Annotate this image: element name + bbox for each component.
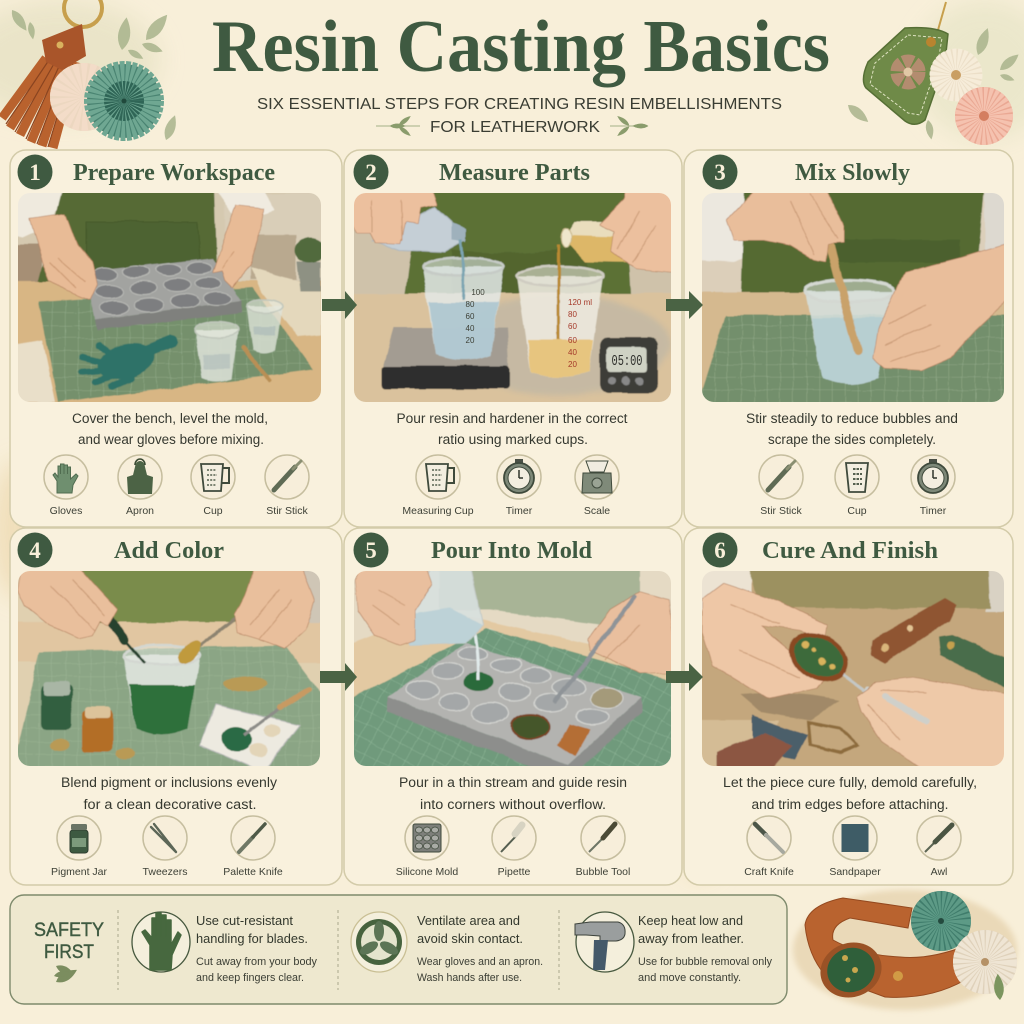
description: [72, 411, 268, 447]
arrow: step 4 to 5: [320, 663, 357, 691]
tool: cup: [835, 455, 879, 517]
description: Stir steadily to reduce bubbles and: [746, 411, 958, 426]
description: Pour in a thin stream and guide resin: [399, 775, 627, 790]
tool: sandpaper: [829, 816, 881, 878]
step number 1: [18, 154, 52, 190]
description: [61, 775, 277, 812]
heading: Mix Slowly: [795, 160, 910, 186]
safety item: cut resistant: [132, 912, 317, 984]
heading: Pour Into Mold: [431, 538, 593, 564]
cup scale numbers: 20: [466, 336, 475, 345]
step number 2: [354, 154, 388, 190]
tool: bubble tool: [576, 816, 630, 878]
scale: [381, 328, 510, 389]
illustration: adding pigment to cup: [12, 565, 326, 772]
timer display: 05:00: [612, 353, 642, 370]
cup scale numbers: 100: [471, 288, 485, 297]
safety heading: [34, 920, 104, 963]
arrow: step 1 to 2: [322, 291, 357, 319]
tool: palette knife: Palette Knife: [223, 866, 283, 878]
step number 4: [18, 532, 52, 568]
description: into corners without overflow.: [420, 797, 606, 812]
panel: step 5 pour into mold: [344, 528, 682, 885]
arrow: step 2 to 3: [666, 291, 703, 319]
cup 1: [422, 240, 504, 360]
cup scale numbers: [466, 288, 592, 369]
description: ratio using marked cups.: [438, 432, 588, 447]
panel: step 6 cure and finish: [684, 528, 1013, 885]
step number 1: 1: [29, 160, 41, 185]
step number 2: 2: [365, 160, 377, 185]
gloves: [82, 337, 172, 386]
tool: gloves: Gloves: [50, 505, 82, 517]
step number 3: [702, 154, 738, 190]
description: [723, 775, 977, 812]
tool: cup: [191, 455, 235, 517]
safety item: ventilate: avoid skin contact.: [417, 932, 523, 946]
illustration: pouring resin in mold: [354, 571, 671, 766]
tool: cup: Cup: [203, 505, 223, 517]
tool: stir stick: [759, 455, 803, 517]
tool: bubble tool: Bubble Tool: [576, 866, 630, 878]
cup 2: [517, 245, 603, 377]
cup scale numbers: 40: [568, 348, 577, 357]
description: scrape the sides completely.: [768, 432, 936, 447]
subtitle: FOR LEATHERWORK: [430, 119, 600, 136]
heading: Measure Parts: [439, 160, 590, 186]
decoration: leather tag and pompoms, top right: [845, 2, 1021, 145]
tool: pigment jar: Pigment Jar: [51, 866, 108, 878]
decoration: leather belt with resin cabochon and pompoms: [793, 890, 1017, 1010]
step number 5: 5: [365, 538, 377, 563]
step number 6: 6: [714, 538, 726, 563]
safety item: ventilate: Ventilate area and: [417, 914, 520, 928]
tool: cup: Cup: [847, 505, 867, 517]
cup scale numbers: 60: [466, 312, 475, 321]
tool: craft knife: [744, 816, 794, 878]
safety item: cut resistant: and keep fingers clear.: [196, 972, 304, 984]
safety item: heat gun: Keep heat low and: [638, 914, 743, 928]
subtitle leaf ornaments: [376, 115, 648, 137]
safety item: heat gun: and move constantly.: [638, 972, 741, 984]
arrow: step 5 to 6: [666, 663, 703, 691]
cup scale numbers: 120 ml: [568, 298, 592, 307]
step number 4: 4: [29, 538, 41, 563]
timer body: [600, 337, 658, 393]
subtitle: SIX ESSENTIAL STEPS FOR CREATING RESIN EMBELLISHMENTS: [257, 96, 782, 113]
safety heading: FIRST: [44, 942, 94, 963]
tool: gloves: [44, 455, 88, 517]
cup scale numbers: 80: [466, 300, 475, 309]
illustration: pouring into cups on a scale: [348, 187, 677, 408]
cup scale numbers: 60: [568, 322, 577, 331]
description: Cover the bench, level the mold,: [72, 411, 268, 426]
tool: awl: [917, 816, 961, 878]
illustration: mold, gloves and cups on mat: [12, 187, 327, 408]
tool: measuring cup: Measuring Cup: [402, 505, 474, 517]
heading: Add Color: [114, 538, 224, 564]
description: [399, 775, 627, 812]
tool: apron: [118, 455, 162, 517]
decoration: tassel and pompoms, top left: [2, 0, 180, 148]
step number 5: [354, 532, 388, 568]
description: Pour resin and hardener in the correct: [396, 411, 628, 426]
subtitle: [257, 96, 782, 136]
tool: craft knife: Craft Knife: [744, 866, 794, 878]
tool: timer: [497, 455, 541, 517]
tool: measuring cup: [402, 455, 474, 517]
tool: timer: Timer: [506, 505, 533, 517]
safety item: cut resistant: Cut away from your body: [196, 956, 317, 968]
tool: stir stick: Stir Stick: [266, 505, 308, 517]
panel: step 4 add color: [10, 528, 342, 885]
tool: pigment jar: [51, 816, 108, 878]
description: for a clean decorative cast.: [84, 797, 256, 812]
tool: silicone mold: Silicone Mold: [396, 866, 458, 878]
safety item: cut resistant: handling for blades.: [196, 932, 308, 946]
heading: Prepare Workspace: [73, 160, 275, 186]
tool: tweezers: Tweezers: [143, 866, 187, 878]
description: [746, 411, 958, 447]
safety item: heat gun: [575, 912, 772, 984]
tool: palette knife: [223, 816, 283, 878]
safety item: heat gun: Use for bubble removal only: [638, 956, 772, 968]
safety item: ventilate: [351, 912, 543, 984]
description: and trim edges before attaching.: [752, 797, 948, 812]
description: Let the piece cure fully, demold carefully,: [723, 775, 977, 790]
hands holding bottles: [348, 187, 677, 272]
tool: scale: Scale: [584, 505, 610, 517]
safety item: cut resistant: Use cut-resistant: [196, 914, 294, 928]
safety item: ventilate: Wash hands after use.: [417, 972, 522, 984]
heading: Cure And Finish: [762, 538, 938, 564]
panel: safety first: [10, 895, 787, 1004]
step number 6: [702, 532, 738, 568]
tool: timer: [911, 455, 955, 517]
tool: pipette: Pipette: [498, 866, 530, 878]
description: [396, 411, 628, 447]
panel: step 3 mix slowly: [684, 150, 1013, 527]
tool: silicone mold: [396, 816, 458, 878]
safety item: heat gun: away from leather.: [638, 932, 744, 946]
tool: sandpaper: Sandpaper: [829, 866, 881, 878]
tool: apron: Apron: [126, 505, 154, 517]
title: Resin Casting Basics: [212, 6, 830, 88]
leaf sprig: [53, 963, 79, 986]
panel: step 2 measure parts: [344, 150, 682, 527]
illustration: trimming finished piece: [696, 565, 1010, 772]
cup scale numbers: 40: [466, 324, 475, 333]
safety heading: SAFETY: [34, 920, 104, 941]
tool: timer: Timer: [920, 505, 947, 517]
tool: tweezers: [143, 816, 187, 878]
tool: stir stick: Stir Stick: [760, 505, 802, 517]
tool: pipette: [492, 816, 536, 878]
panel: step 1 prepare workspace: [10, 150, 342, 527]
illustration: stirring resin: [696, 187, 1010, 408]
description: Blend pigment or inclusions evenly: [61, 775, 277, 790]
bottles: [372, 207, 652, 263]
tool: stir stick: [265, 455, 309, 517]
cup scale numbers: 80: [568, 310, 577, 319]
hands holding mold: [30, 205, 263, 300]
step number 3: 3: [714, 160, 726, 185]
cup scale numbers: 20: [568, 360, 577, 369]
tool: awl: Awl: [931, 866, 947, 878]
cup scale numbers: 60: [568, 336, 577, 345]
cups: [194, 299, 283, 381]
description: and wear gloves before mixing.: [78, 432, 264, 447]
safety item: ventilate: Wear gloves and an apron.: [417, 956, 543, 968]
tool: scale: [575, 455, 619, 517]
